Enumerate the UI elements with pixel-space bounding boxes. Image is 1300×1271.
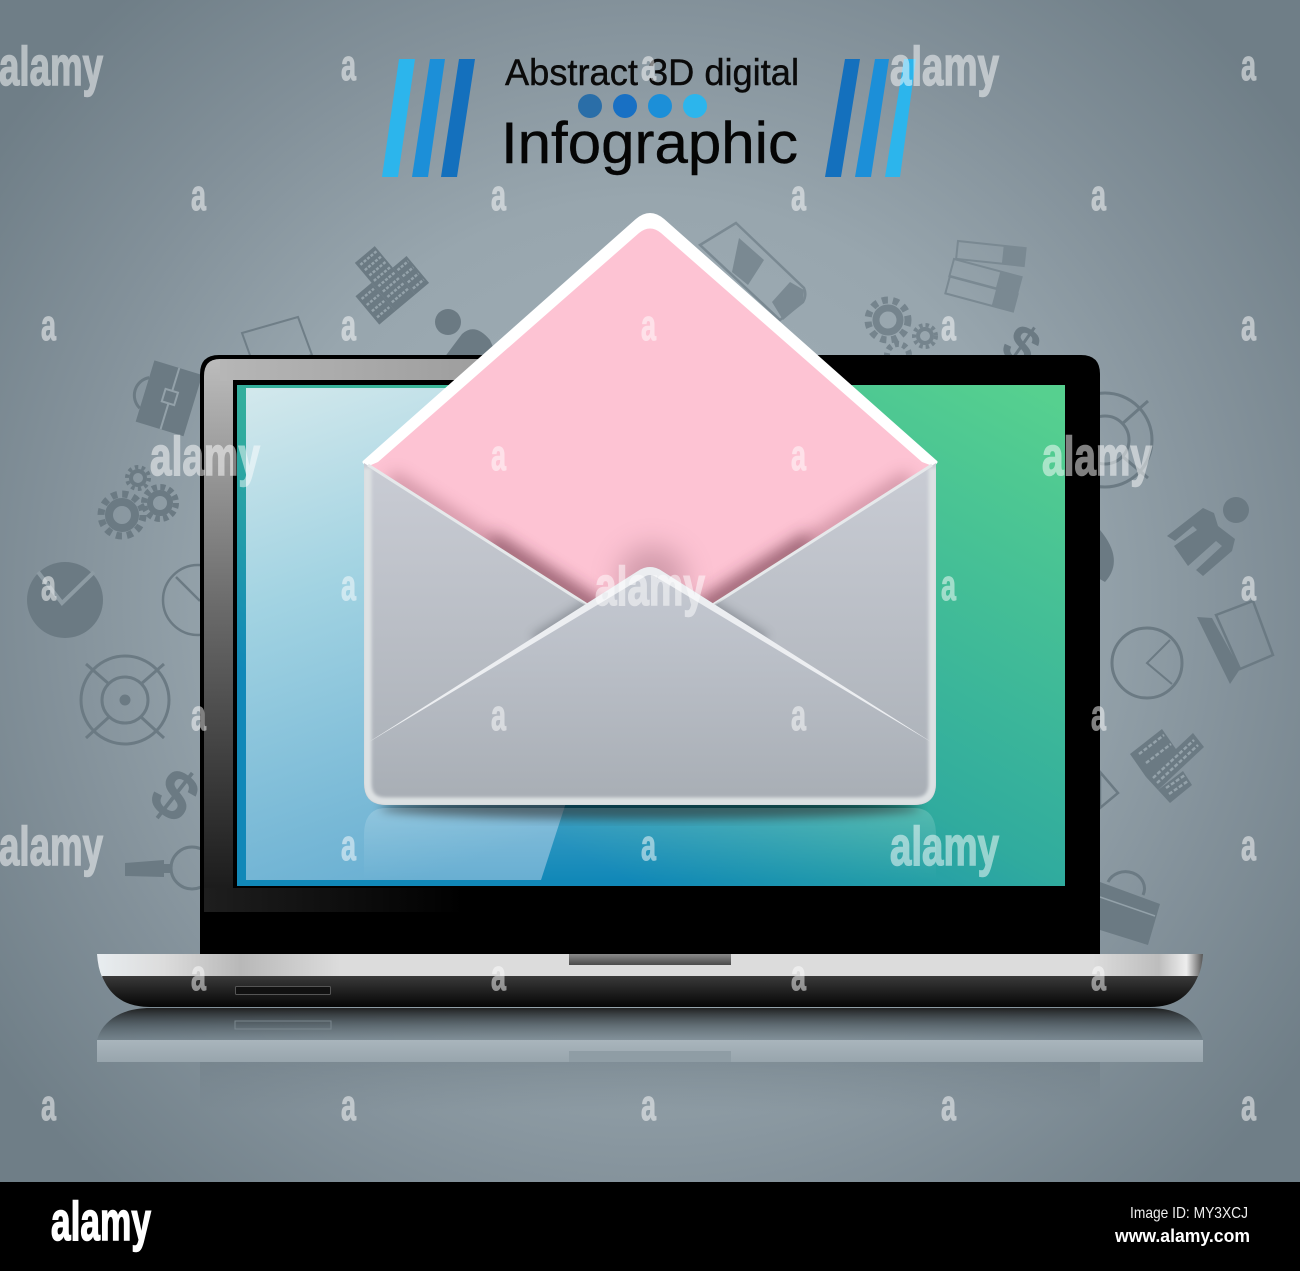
- footer bar: [0, 1182, 1300, 1271]
- watermarks: alamy: [890, 815, 999, 877]
- screen: [237, 385, 1065, 886]
- watermarks: a: [1091, 171, 1106, 220]
- watermarks: a: [491, 951, 506, 1000]
- panel rim: [368, 465, 932, 645]
- watermarks: a: [941, 561, 956, 610]
- screen frame: [233, 380, 1065, 888]
- icon: left pie chart: [27, 562, 103, 638]
- watermarks: a: [1241, 41, 1256, 90]
- envelope back panels: [364, 463, 936, 805]
- letter flap outline: [364, 214, 936, 470]
- watermarks: a: [791, 691, 806, 740]
- title line one: Abstract 3D digital: [505, 52, 799, 93]
- flap inner shadow: [386, 468, 914, 603]
- keyboard base silver: [97, 954, 1203, 977]
- icon: left briefcase: [126, 358, 202, 436]
- front flap shadow: [530, 599, 770, 639]
- four dots: [578, 94, 707, 118]
- title line two: Infographic: [501, 111, 798, 176]
- watermarks: a: [491, 171, 506, 220]
- watermarks: a: [341, 1081, 356, 1130]
- watermarks: a: [1091, 951, 1106, 1000]
- watermarks: a: [341, 301, 356, 350]
- card slot: [236, 986, 330, 994]
- pink flap: [371, 228, 930, 700]
- laptop reflection: [97, 1008, 1203, 1112]
- image id: Image ID: MY3XCJ: [1130, 1205, 1248, 1222]
- icon: left gears: [101, 467, 176, 536]
- header: [382, 52, 916, 177]
- envelope floor shadow: [380, 797, 920, 819]
- watermarks: a: [791, 171, 806, 220]
- watermarks: a: [41, 1081, 56, 1130]
- screen gloss: [246, 388, 700, 880]
- icon: right briefcase: [1100, 872, 1160, 945]
- icon: top gears: [868, 300, 936, 366]
- watermarks: a: [641, 41, 656, 90]
- envelope rim: [367, 468, 933, 802]
- icon: right person: [1167, 497, 1249, 576]
- watermarks: a: [641, 1081, 656, 1130]
- icon: left clock: [163, 565, 233, 635]
- icon: left dollar: $: [136, 752, 214, 838]
- background business icons: [27, 223, 1273, 945]
- watermarks: a: [1241, 821, 1256, 870]
- bezel highlight bottom: [204, 888, 464, 912]
- watermarks: a: [41, 561, 56, 610]
- watermarks: a: [791, 951, 806, 1000]
- envelope reflection: [364, 808, 936, 880]
- footer logo: alamy: [51, 1190, 151, 1252]
- icon: binders: [945, 241, 1026, 312]
- watermarks: a: [1241, 1081, 1256, 1130]
- website: www.alamy.com: [1114, 1226, 1250, 1246]
- icon: right clock: [1112, 628, 1182, 698]
- bezel highlight top: [220, 359, 520, 381]
- watermarks: alamy: [890, 35, 999, 97]
- icon: left target: [81, 656, 169, 744]
- keyboard base dark: [102, 976, 1198, 1007]
- watermarks: a: [1241, 561, 1256, 610]
- watermarks: a: [1091, 691, 1106, 740]
- front flap: [364, 567, 936, 805]
- watermarks: a: [191, 951, 206, 1000]
- watermarks: alamy: [0, 815, 103, 877]
- icon: top buildings: [339, 235, 429, 325]
- left stripes: [382, 59, 475, 177]
- watermarks: a: [941, 1081, 956, 1130]
- bezel highlight left: [204, 359, 233, 912]
- icon: top dollar: $: [991, 311, 1053, 380]
- laptop lid: [200, 355, 1100, 955]
- watermarks: a: [191, 171, 206, 220]
- watermarks: a: [341, 41, 356, 90]
- front flap highlight: [364, 567, 936, 745]
- watermarks: a: [641, 301, 656, 350]
- watermarks: alamy: [595, 555, 705, 617]
- icon: left magnifier: [125, 847, 213, 889]
- watermarks: a: [191, 691, 206, 740]
- icon: right buildings: [1130, 729, 1204, 803]
- envelope: [364, 214, 936, 880]
- watermarks: a: [941, 301, 956, 350]
- icon: right target: [1058, 393, 1152, 487]
- watermarks: alamy: [1042, 425, 1152, 487]
- icon: laptop outline top left: [242, 317, 312, 372]
- watermarks: a: [341, 561, 356, 610]
- watermarks: a: [491, 691, 506, 740]
- icon: right pie slice: [1098, 530, 1114, 582]
- right stripes: [825, 59, 916, 177]
- icon: right laptop: [1197, 601, 1273, 684]
- watermarks: alamy: [0, 35, 103, 97]
- watermarks: a: [341, 821, 356, 870]
- laptop: [97, 355, 1203, 1112]
- hinge notch: [569, 954, 731, 965]
- icon: right monitor: [1100, 772, 1118, 808]
- watermarks: a: [641, 821, 656, 870]
- watermarks: alamy: [150, 425, 260, 487]
- watermarks: a: [791, 431, 806, 480]
- watermarks: a: [1241, 301, 1256, 350]
- icon: top person: [435, 309, 498, 358]
- watermarks: a: [491, 431, 506, 480]
- icon: tablet: [700, 223, 805, 320]
- watermarks: a: [41, 301, 56, 350]
